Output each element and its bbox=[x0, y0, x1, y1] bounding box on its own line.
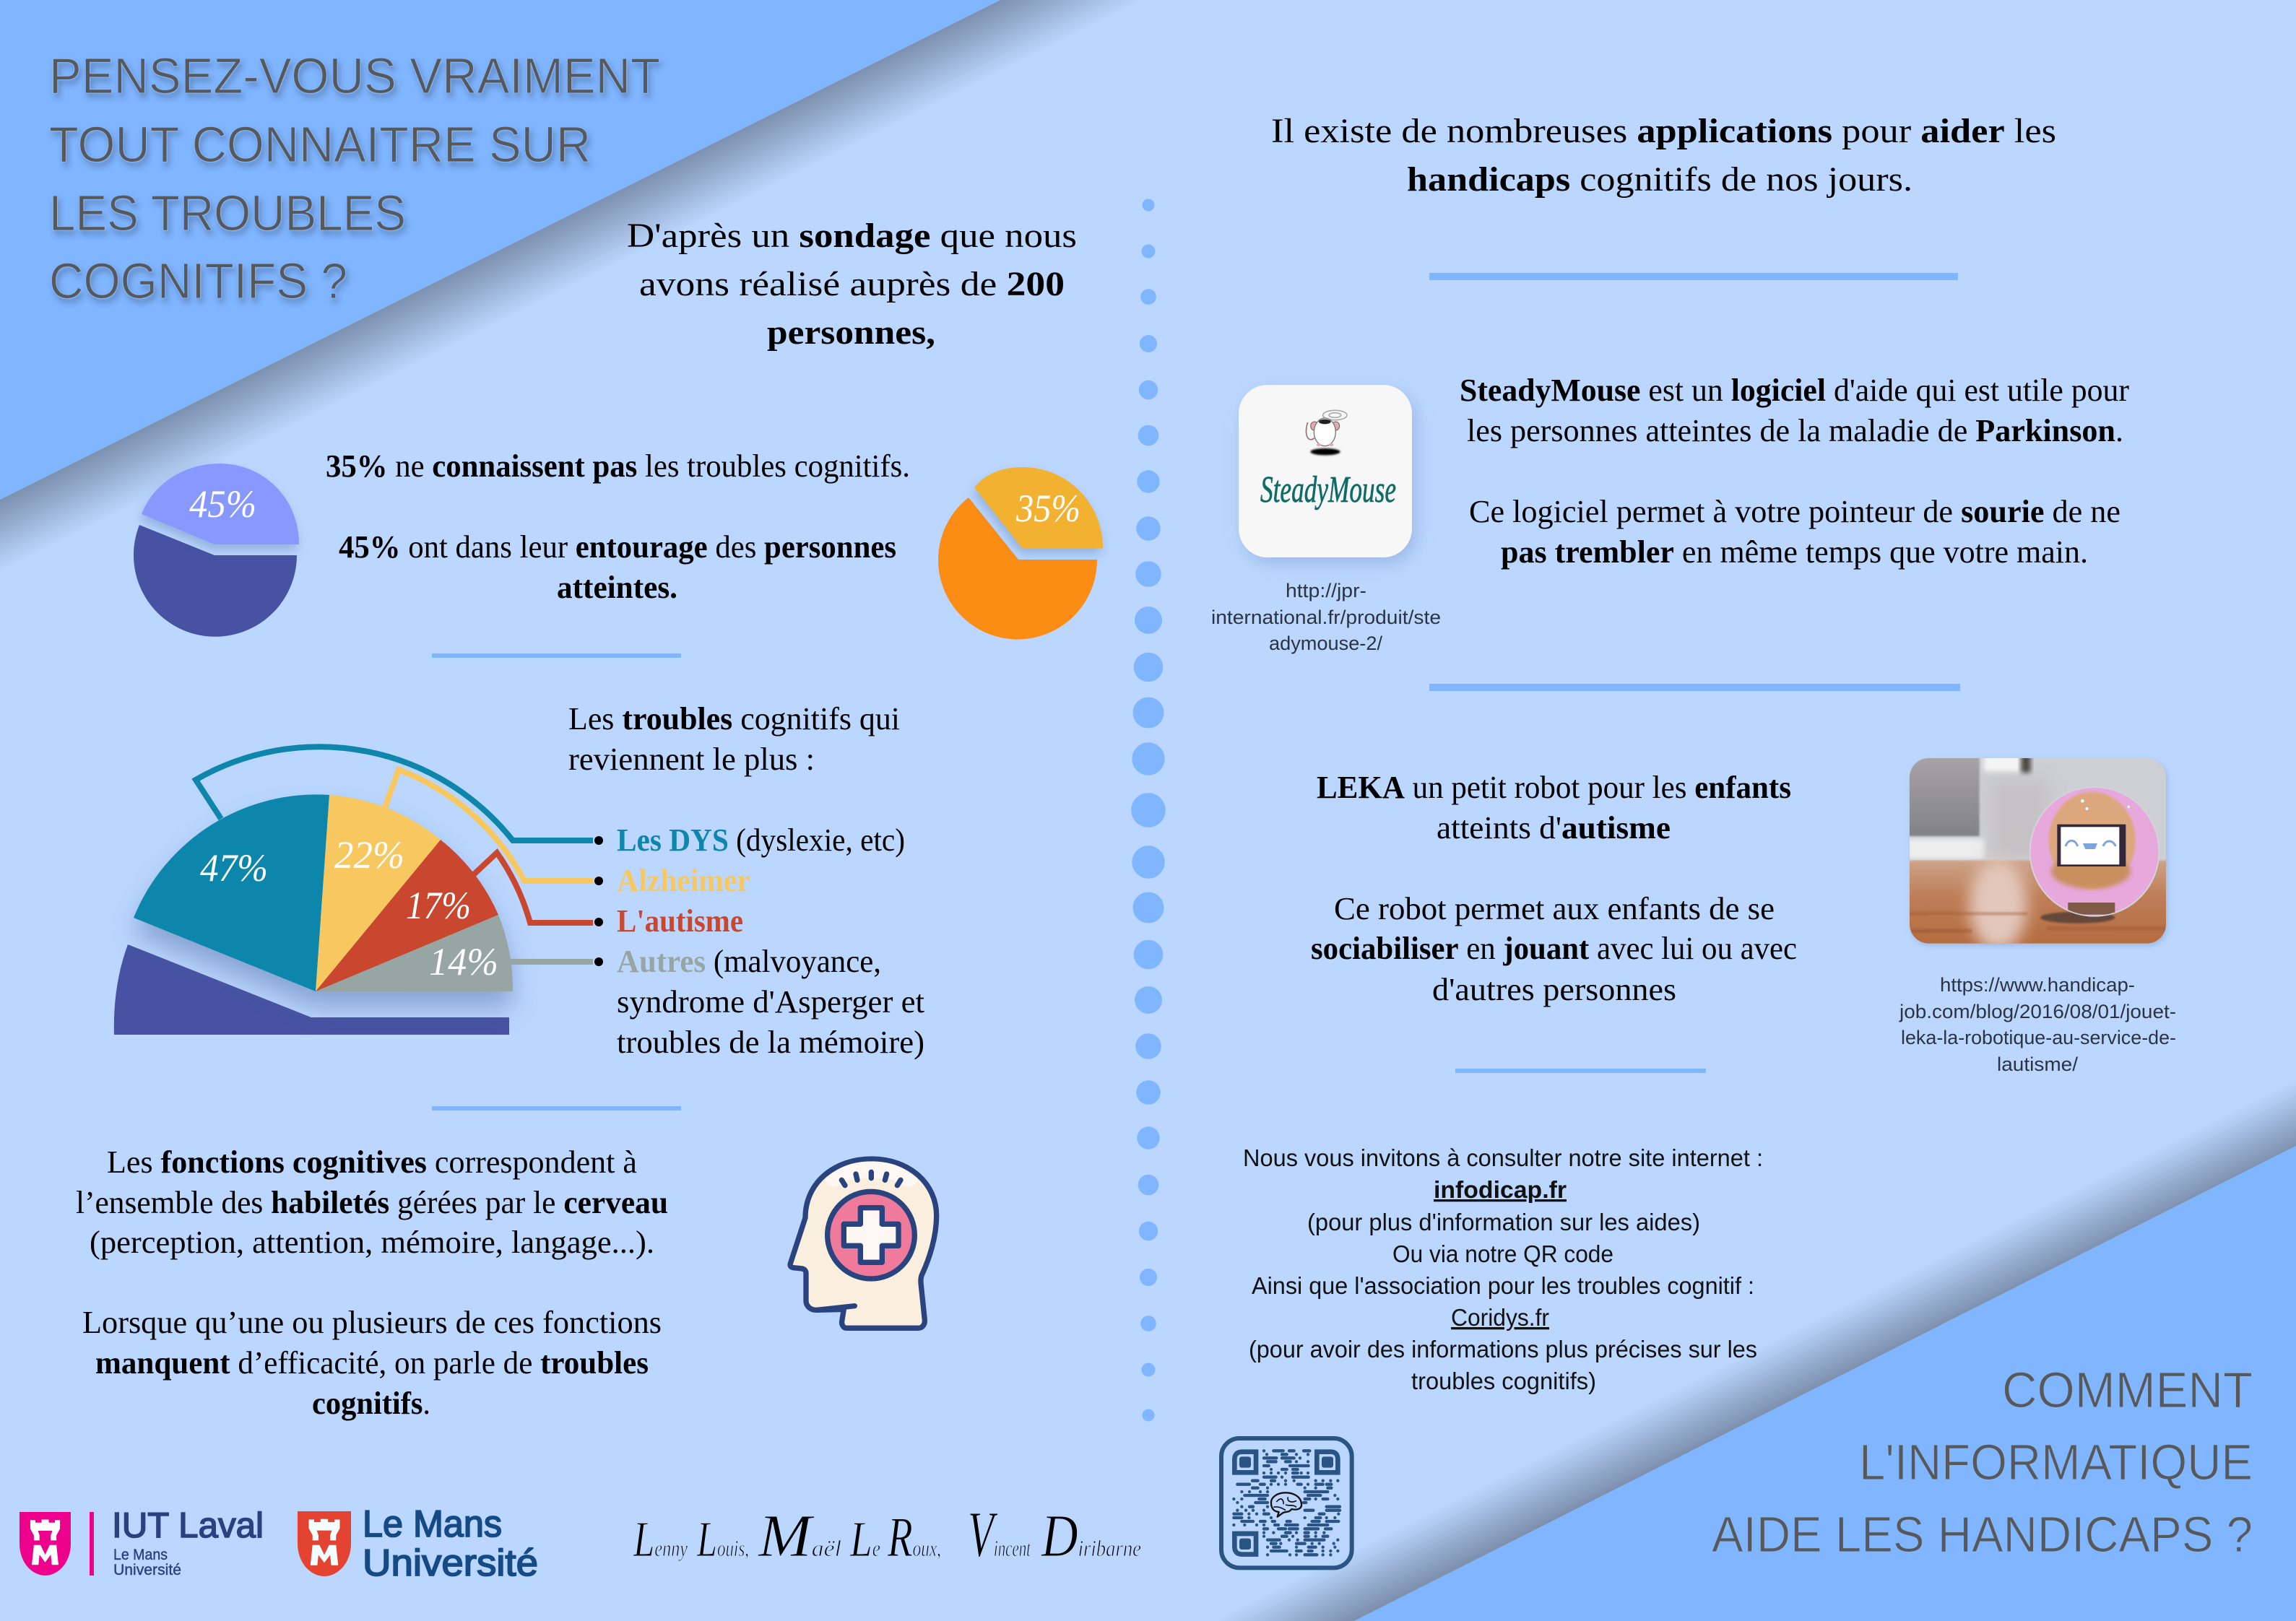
title: top left: LES TROUBLES bbox=[49, 185, 406, 241]
text block: chart heading bbox=[568, 701, 900, 777]
caption: SteadyMouse source: adymouse-2/ bbox=[1269, 633, 1382, 654]
text block: chart heading: reviennent le plus : bbox=[568, 742, 815, 777]
text block: cognitive functions definition bbox=[76, 1144, 668, 1421]
title: bottom right: AIDE LES HANDICAPS ? bbox=[1712, 1506, 2253, 1563]
text block: survey results: atteintes. bbox=[557, 570, 677, 605]
logo wordmark: SteadyMouse bbox=[1260, 469, 1396, 510]
logo: Le Mans Université: Université bbox=[363, 1542, 538, 1584]
leader dots bbox=[594, 836, 603, 966]
text block: website and association links: Nous vous invitons à consulter notre site internet : bbox=[1243, 1144, 1763, 1171]
text block: website and association links: (pour avoir des informations plus précises sur les bbox=[1249, 1336, 1757, 1363]
signature: authors: Louis, bbox=[696, 1512, 749, 1568]
pie chart: 35 percent: 35% bbox=[1015, 487, 1080, 530]
text block: website and association links: (pour plus d'information sur les aides) bbox=[1307, 1209, 1700, 1235]
text block: applications intro: handicaps cognitifs de nos jours. bbox=[1407, 160, 1912, 199]
chart legend: Les DYS (dyslexie, etc) bbox=[617, 822, 905, 858]
text block: cognitive functions definition: manquent d’efficacité, on parle de troubles bbox=[95, 1345, 649, 1381]
text block: website and association links: troubles cognitifs) bbox=[1411, 1368, 1596, 1394]
text block: website and association links: Ainsi que l'association pour les troubles cognitif : bbox=[1252, 1272, 1754, 1299]
text block: LEKA description: atteints d'autisme bbox=[1437, 810, 1671, 846]
text block: applications intro: Il existe de nombreuses applications pour aider les bbox=[1271, 112, 2056, 150]
caption: SteadyMouse source bbox=[1211, 580, 1441, 654]
slice values: 14% bbox=[429, 940, 498, 983]
text block: SteadyMouse description: les personnes atteintes de la maladie de Parkinson. bbox=[1467, 413, 2123, 448]
title: bottom right: L'INFORMATIQUE bbox=[1859, 1434, 2253, 1490]
text block: SteadyMouse description: Ce logiciel permet à votre pointeur de sourie de ne bbox=[1469, 494, 2120, 529]
logo: IUT Laval: Le Mans bbox=[113, 1547, 168, 1563]
leader lines bbox=[196, 747, 593, 962]
text block: survey results bbox=[326, 448, 910, 605]
logo: Le Mans Université bbox=[298, 1503, 538, 1584]
title: top left: PENSEZ-VOUS VRAIMENT bbox=[49, 48, 660, 104]
caption: LEKA source bbox=[1899, 974, 2176, 1075]
text block: cognitive functions definition: (perception, attention, mémoire, langage...). bbox=[90, 1225, 654, 1260]
pie chart: 45 percent: 45% bbox=[189, 482, 256, 526]
signature: authors: Diribarne bbox=[1041, 1503, 1141, 1570]
text block: website and association links: Coridys.fr bbox=[1451, 1304, 1549, 1331]
caption: LEKA source: job.com/blog/2016/08/01/jouet- bbox=[1899, 1001, 2176, 1022]
logo: IUT Laval bbox=[20, 1506, 264, 1578]
text block: LEKA description bbox=[1311, 770, 1797, 1007]
decorative corner: bottom right with shadow bbox=[1199, 1069, 2296, 1621]
text block: survey results: 35% ne connaissent pas les troubles cognitifs. bbox=[326, 448, 910, 484]
slice values: 17% bbox=[406, 884, 471, 927]
caption: LEKA source: lautisme/ bbox=[1997, 1053, 2079, 1075]
icon: head with medical cross bbox=[790, 1159, 937, 1328]
logo: IUT Laval: IUT Laval bbox=[112, 1506, 264, 1545]
title: top left: TOUT CONNAITRE SUR bbox=[49, 116, 591, 173]
logo: IUT Laval: Université bbox=[113, 1562, 181, 1578]
chart legend: troubles de la mémoire) bbox=[617, 1025, 924, 1060]
text block: survey intro bbox=[627, 217, 1077, 352]
pie chart: most frequent cognitive disorders bbox=[114, 747, 603, 1035]
caption: SteadyMouse source: international.fr/produit/ste bbox=[1211, 607, 1441, 628]
QR code bbox=[1221, 1438, 1352, 1568]
text block: survey results: 45% ont dans leur entourage des personnes bbox=[339, 529, 896, 565]
text block: survey intro: D'après un sondage que nous bbox=[627, 217, 1077, 255]
text block: SteadyMouse description bbox=[1460, 373, 2129, 570]
chart legend: Autres (malvoyance, bbox=[617, 944, 881, 979]
text block: LEKA description: Ce robot permet aux enfants de se bbox=[1334, 891, 1775, 926]
card: SteadyMouse logo bbox=[1239, 385, 1412, 557]
text block: survey intro: avons réalisé auprès de 200 bbox=[639, 265, 1065, 303]
title: bottom right: COMMENT bbox=[2002, 1362, 2253, 1418]
text block: LEKA description: d'autres personnes bbox=[1432, 972, 1676, 1007]
text block: LEKA description: LEKA un petit robot pour les enfants bbox=[1317, 770, 1791, 805]
text block: applications intro bbox=[1271, 112, 2056, 199]
text block: website and association links bbox=[1243, 1144, 1763, 1394]
signature: authors: Roux, bbox=[887, 1505, 941, 1568]
pie chart: 35 percent bbox=[938, 467, 1103, 639]
text block: cognitive functions definition: cognitifs. bbox=[312, 1386, 430, 1421]
text block: website and association links: Ou via notre QR code bbox=[1392, 1240, 1613, 1267]
pie slices bbox=[134, 794, 513, 991]
slice values bbox=[200, 833, 498, 983]
title: top left: COGNITIFS ? bbox=[49, 253, 347, 309]
title: bottom right bbox=[1712, 1362, 2253, 1563]
text block: website and association links: infodicap.fr bbox=[1434, 1176, 1567, 1203]
caption: LEKA source: https://www.handicap- bbox=[1940, 974, 2135, 996]
text block: SteadyMouse description: pas trembler en même temps que votre main. bbox=[1501, 534, 2088, 570]
text block: SteadyMouse description: SteadyMouse est un logiciel d'aide qui est utile pour bbox=[1460, 373, 2129, 408]
caption: LEKA source: leka-la-robotique-au-service-de- bbox=[1901, 1027, 2176, 1048]
central dotted divider bbox=[1131, 199, 1166, 1421]
caption: SteadyMouse source: http://jpr- bbox=[1286, 580, 1366, 601]
text block: chart heading: Les troubles cognitifs qui bbox=[568, 701, 900, 736]
chart legend: L'autisme bbox=[617, 903, 743, 939]
slice values: 47% bbox=[200, 846, 268, 890]
photo: LEKA robot bbox=[1902, 751, 2172, 951]
signature: authors: Vincent bbox=[968, 1499, 1031, 1570]
signature: authors: Lenny bbox=[633, 1512, 688, 1568]
icon: mouse bbox=[1307, 410, 1347, 455]
text block: cognitive functions definition: l’ensemble des habiletés gérées par le cerveau bbox=[76, 1185, 668, 1220]
signature: authors bbox=[633, 1499, 1141, 1570]
slice values: 22% bbox=[334, 833, 404, 877]
chart legend: syndrome d'Asperger et bbox=[617, 984, 924, 1020]
text block: cognitive functions definition: Les fonctions cognitives correspondent à bbox=[107, 1144, 637, 1180]
text block: LEKA description: sociabiliser en jouant avec lui ou avec bbox=[1311, 931, 1797, 966]
chart legend bbox=[617, 822, 924, 1060]
logo: Le Mans Université: Le Mans bbox=[363, 1503, 502, 1545]
title: top left bbox=[49, 48, 660, 309]
robot sphere bbox=[2030, 787, 2159, 916]
chart base shape bbox=[114, 944, 509, 1035]
signature: authors: Maël bbox=[758, 1503, 841, 1570]
signature: authors: Le bbox=[849, 1512, 880, 1568]
icon: brain in QR code bbox=[1271, 1492, 1301, 1517]
decorative corner: top left with shadow bbox=[0, 0, 1156, 578]
text block: cognitive functions definition: Lorsque qu’une ou plusieurs de ces fonctions bbox=[82, 1305, 662, 1340]
chart legend: Alzheimer bbox=[617, 863, 750, 898]
text block: survey intro: personnes, bbox=[767, 313, 935, 352]
pie chart: 45 percent bbox=[134, 464, 299, 637]
